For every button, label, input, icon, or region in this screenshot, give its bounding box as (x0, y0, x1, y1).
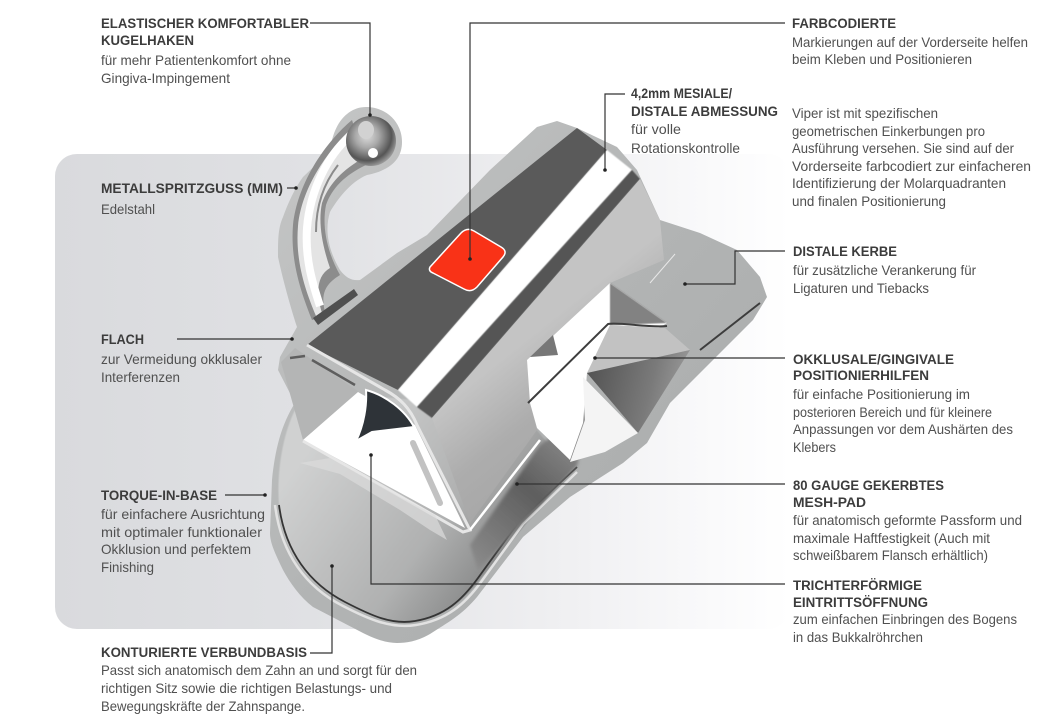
text: positioning aids: für einfache Positionierung im (793, 386, 970, 402)
text: mesh pad: schweißbarem Flansch erhältlich) (793, 547, 988, 563)
text: dimension (631, 86, 778, 156)
text: metal injection moulding: Edelstahl (101, 201, 155, 217)
text: contoured bonding base (101, 645, 417, 714)
text: elastic ball hook: für mehr Patientenkomfort ohne (101, 52, 291, 68)
text: contoured bonding base: Bewegungskräfte der Zahnspange. (101, 698, 305, 714)
text: metal injection moulding (101, 181, 283, 217)
base highlight rim (275, 472, 577, 626)
notch dark triangle (587, 350, 690, 433)
colour mark (429, 229, 505, 291)
front channel highlight (413, 443, 440, 503)
text: mesh pad: 80 GAUGE GEKERBTES (793, 478, 944, 493)
text: positioning aids: Klebers (793, 439, 836, 455)
text: mesh pad: MESH-PAD (793, 495, 866, 510)
text: torque in base: mit optimaler funktionaler (101, 524, 262, 540)
text: viper description: Viper ist mit spezifischen (792, 105, 938, 121)
text: distal notch: Ligaturen und Tiebacks (793, 280, 929, 296)
text: funnel entry: EINTRITTSÖFFNUNG (793, 595, 928, 610)
top surface: thin dark band (417, 170, 640, 418)
text: funnel entry: TRICHTERFÖRMIGE (793, 578, 922, 593)
text: funnel entry: zum einfachen Einbringen des Bogens (793, 611, 1017, 627)
leader: distal notch (683, 251, 785, 286)
distal notch line (650, 254, 675, 283)
text: mesh pad: maximale Haftfestigkeit (Auch mit (793, 530, 990, 546)
text: viper description: Vorderseite farbcodiert zur einfacheren (792, 158, 1031, 174)
leader: funnel entry (369, 453, 785, 584)
front face white (303, 392, 465, 528)
text: torque in base: Finishing (101, 559, 154, 575)
text: dimension: Rotationskontrolle (631, 140, 740, 156)
leader: torque in base (225, 493, 267, 497)
text: viper description (792, 105, 1031, 209)
leader: dimension (603, 94, 625, 172)
text: funnel entry (793, 578, 1017, 645)
text: positioning aids: posterioren Bereich und für kleinere (793, 404, 992, 420)
text: contoured bonding base: KONTURIERTE VERBUNDBASIS (101, 645, 307, 660)
text: distal notch: DISTALE KERBE (793, 244, 897, 259)
text: elastic ball hook: ELASTISCHER KOMFORTABLER (101, 16, 309, 31)
mesh shadow (470, 410, 590, 570)
text: flat: Interferenzen (101, 369, 180, 385)
text: torque in base: TORQUE-IN-BASE (101, 488, 217, 503)
text: distal notch (793, 244, 976, 296)
mesial highlight (290, 356, 355, 385)
leader: mim (287, 186, 298, 190)
notch lower metal (587, 325, 690, 373)
notch upper pyramid (610, 283, 667, 325)
leader: colour coded (468, 23, 785, 261)
hook stem (293, 120, 366, 325)
text: elastic ball hook: KUGELHAKEN (101, 33, 194, 48)
background panel (55, 154, 790, 629)
text: colour coded (792, 16, 1028, 67)
text: torque in base (101, 488, 265, 575)
text: flat: FLACH (101, 332, 144, 347)
text: mesh pad: für anatomisch geformte Passform und (793, 512, 1022, 528)
text: torque in base: für einfachere Ausrichtung (101, 506, 265, 522)
text: positioning aids: Anpassungen vor dem Aushärten des (793, 421, 1013, 437)
text: positioning aids: POSITIONIERHILFEN (793, 368, 929, 383)
bonding base pad (278, 395, 570, 623)
text: colour coded: beim Kleben und Positionieren (792, 51, 972, 67)
notch opening white (527, 283, 667, 460)
leader: flat (177, 337, 294, 341)
mesial dark band (312, 396, 358, 442)
text: elastic ball hook: Gingiva-Impingement (101, 70, 230, 86)
text: viper description: geometrischen Einkerbungen pro (792, 123, 985, 139)
leader: ball hook (310, 23, 372, 117)
mesial end face (281, 348, 362, 440)
top surface: dark band (307, 128, 607, 390)
tube entry funnel (356, 390, 414, 441)
hook ball (346, 116, 396, 166)
text: torque in base: Okklusion und perfektem (101, 541, 251, 557)
text: metal injection moulding: METALLSPRITZGUSS (MIM) (101, 181, 283, 196)
text: flat (101, 332, 262, 385)
notch inner shape (530, 335, 558, 357)
text: positioning aids: OKKLUSALE/GINGIVALE (793, 352, 954, 367)
text: funnel entry: in das Bukkalröhrchen (793, 629, 923, 645)
leader: positioning aids (593, 356, 785, 360)
text: colour coded: FARBCODIERTE (792, 16, 896, 31)
notch white highlight (570, 377, 638, 462)
base lower right rim (700, 303, 760, 350)
top surface: highlight band (398, 150, 632, 407)
text: viper description: Ausführung versehen. Sie sind auf der (792, 140, 1014, 156)
text: viper description: Identifizierung der Molarquadranten (792, 175, 1006, 191)
flange silhouette (270, 107, 767, 643)
text: viper description: und finalen Positionierung (792, 193, 946, 209)
text: positioning aids (793, 352, 1013, 455)
text: mesh pad (793, 478, 1022, 563)
leader: mesh pad (515, 482, 785, 486)
bracket illustration: buccal tube (270, 107, 767, 643)
text: distal notch: für zusätzliche Verankerung für (793, 262, 976, 278)
side face of tube (432, 179, 664, 523)
text: dimension: für volle (631, 121, 681, 137)
text: elastic ball hook (101, 16, 309, 86)
text: dimension: DISTALE ABMESSUNG (631, 104, 778, 119)
text: dimension: 4,2mm MESIALE/ (631, 86, 732, 101)
text: contoured bonding base: richtigen Sitz sowie die richtigen Belastungs- und (101, 680, 392, 696)
text: contoured bonding base: Passt sich anatomisch dem Zahn an und sorgt für den (101, 662, 417, 678)
mesh pad facets (300, 458, 447, 540)
base dark rim (279, 467, 577, 622)
front frame (303, 345, 470, 532)
positioning aid line (528, 324, 667, 403)
leader: contoured base (310, 564, 334, 653)
text: flat: zur Vermeidung okklusaler (101, 351, 262, 367)
text: colour coded: Markierungen auf der Vorderseite helfen (792, 34, 1028, 50)
